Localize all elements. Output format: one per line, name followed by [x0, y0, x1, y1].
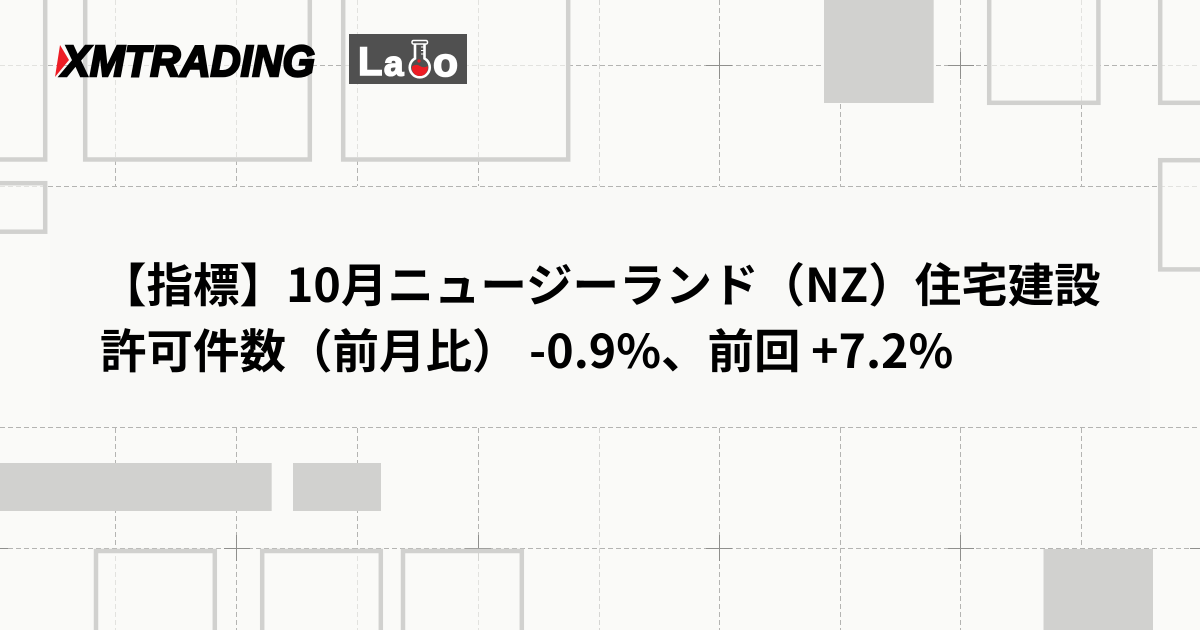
- title: 【指標】10月ニュージーランド（NZ）住宅建設: [100, 249, 1101, 316]
- title: [100, 249, 1101, 382]
- outlined frames top: [0, 0, 1200, 269]
- logo text: L: L: [358, 40, 382, 84]
- icon: flask: [410, 40, 430, 77]
- central panel: [50, 187, 1150, 427]
- icon: red arrow: [55, 45, 69, 77]
- logo text: o: o: [433, 41, 458, 84]
- logo text: a: a: [384, 44, 404, 84]
- Lab logo: [349, 34, 467, 84]
- XMTRADING logo: [55, 38, 316, 84]
- title: 許可件数（前月比） -0.9%、前回 +7.2%: [100, 315, 953, 382]
- outlined frames bottom: [96, 551, 522, 630]
